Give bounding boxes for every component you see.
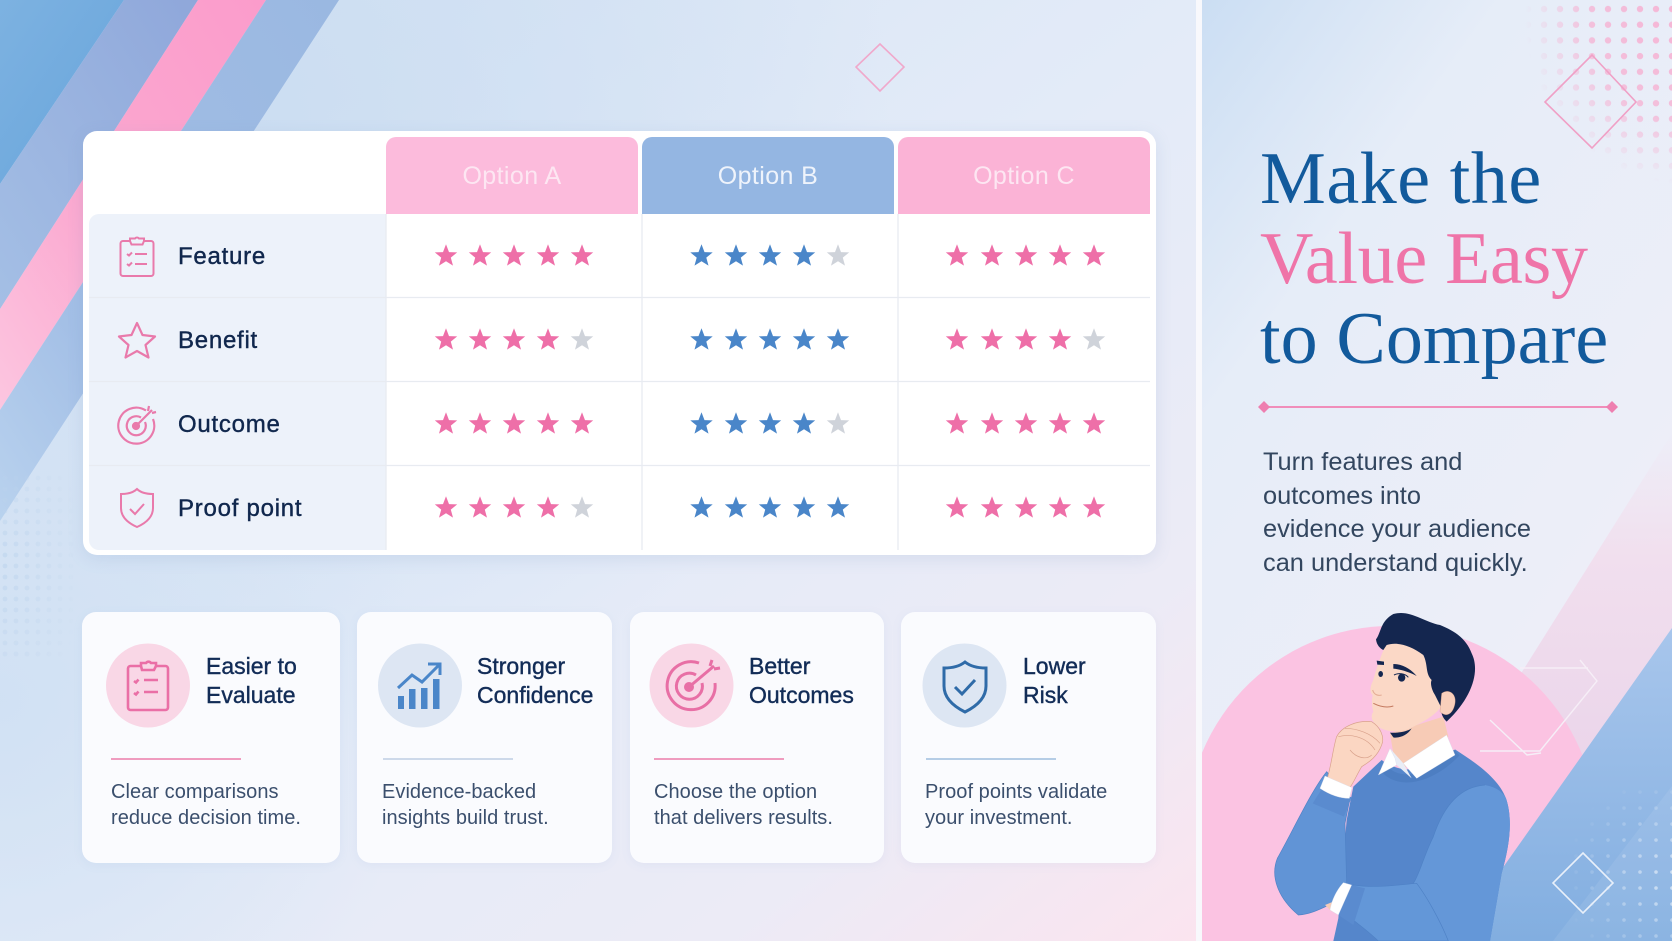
icon: proof point shield <box>120 488 154 528</box>
panel: card Easier to Evaluate <box>82 612 340 863</box>
title: Value Easy <box>1260 218 1588 300</box>
icon: shield in blue circle <box>922 644 1006 728</box>
divider: card 3 <box>654 758 784 760</box>
icon: outcome target <box>117 406 156 445</box>
heading: Easier to Evaluate <box>206 653 297 708</box>
text: intro paragraph <box>1263 448 1531 576</box>
icon: bar chart in blue circle <box>378 644 462 728</box>
panel: right column background and shapes <box>1202 0 1672 941</box>
text: card 2 description: insights build trust. <box>382 807 549 829</box>
text: card 1 description: reduce decision time. <box>111 807 301 829</box>
label: Feature: Feature <box>178 243 266 270</box>
panel: card Better Outcomes <box>630 612 884 863</box>
header: Option C <box>898 137 1150 214</box>
heading: Lower Risk: Lower <box>1023 653 1086 679</box>
left arm <box>1275 772 1350 915</box>
text: card 4 description: your investment. <box>925 807 1073 829</box>
text: card 2 description <box>382 781 549 829</box>
text: intro paragraph: evidence your audience <box>1263 515 1531 543</box>
divider: card 2 <box>383 758 513 760</box>
icon: benefit star <box>118 322 156 359</box>
header: Option B: Option B <box>718 162 818 190</box>
lower hand and cuff <box>1325 902 1333 912</box>
hair <box>1376 613 1475 722</box>
title: to Compare <box>1260 298 1608 380</box>
icon: feature clipboard <box>120 236 154 277</box>
panel: comparison table <box>83 131 1156 555</box>
raised hand <box>1327 721 1383 787</box>
panel: card Stronger Confidence <box>357 612 612 863</box>
neck <box>1390 717 1448 768</box>
text: intro paragraph: can understand quickly. <box>1263 548 1528 576</box>
header: Option C: Option C <box>973 162 1075 190</box>
label: Proof point: Proof point <box>178 495 302 522</box>
heading: Lower Risk <box>1023 653 1086 708</box>
label: Outcome: Outcome <box>178 411 281 438</box>
nose and mouth <box>1373 690 1382 695</box>
divider: title rule with diamonds <box>1258 401 1618 413</box>
text: card 4 description: Proof points validate <box>925 781 1107 803</box>
text: card 3 description <box>654 781 833 829</box>
heading: Easier to Evaluate: Evaluate <box>206 682 296 708</box>
divider: card 1 <box>111 758 241 760</box>
ear <box>1440 691 1455 715</box>
panel: card Lower Risk <box>901 612 1156 863</box>
header: Option B <box>642 137 894 214</box>
sweater collar <box>1383 753 1457 778</box>
icon: decorative diamond outline, top centre <box>855 43 905 92</box>
header: Option A <box>386 137 638 214</box>
label: Benefit: Benefit <box>178 327 258 354</box>
forearm <box>1342 883 1448 941</box>
text: card 2 description: Evidence-backed <box>382 781 536 803</box>
header: Option A: Option A <box>462 162 562 190</box>
text: card 3 description: that delivers results. <box>654 807 833 829</box>
sleeve ribbing <box>1313 787 1352 817</box>
text: card 4 description <box>925 781 1107 829</box>
heading: Stronger Confidence: Stronger <box>477 653 565 679</box>
heading: Easier to Evaluate: Easier to <box>206 653 297 679</box>
text: card 3 description: Choose the option <box>654 781 817 803</box>
icon: clipboard in pink circle <box>106 644 190 728</box>
divider: card 4 <box>926 758 1056 760</box>
heading: Better Outcomes: Better <box>749 653 810 679</box>
row label column background <box>89 214 386 550</box>
heading: Better Outcomes: Outcomes <box>749 682 854 708</box>
heading: Stronger Confidence <box>477 653 593 708</box>
heading: Stronger Confidence: Confidence <box>477 682 593 708</box>
text: card 1 description <box>111 781 301 829</box>
right upper arm <box>1413 785 1510 941</box>
heading: Better Outcomes <box>749 653 854 708</box>
background: left panel gradient with diagonal stripes <box>0 0 1202 941</box>
shirt collar <box>1390 748 1412 778</box>
upper cuff <box>1320 776 1352 798</box>
face <box>1370 642 1450 731</box>
text: intro paragraph: Turn features and <box>1263 448 1462 476</box>
text: intro paragraph: outcomes into <box>1263 482 1421 510</box>
title: Make the <box>1260 138 1542 220</box>
torso <box>1333 749 1510 941</box>
text: card 1 description: Clear comparisons <box>111 781 279 803</box>
illustration: thinking man <box>1274 613 1510 941</box>
eyes and brows <box>1377 661 1417 676</box>
heading: Lower Risk: Risk <box>1023 682 1068 708</box>
title <box>1260 138 1608 380</box>
icon: target in pink circle <box>650 644 734 728</box>
